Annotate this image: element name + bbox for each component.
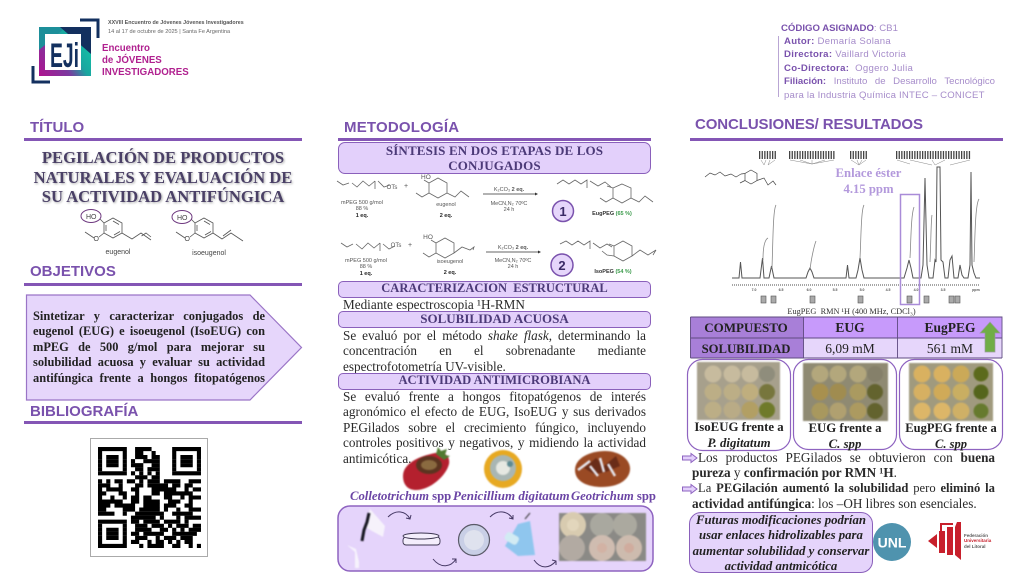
plate caption: C. spp xyxy=(935,437,967,451)
chemical structures: eugenol and isoeugenol: eugenol xyxy=(106,249,131,256)
section bar: solubilidad xyxy=(338,311,651,328)
reaction 2: MeCN,N₂ 70ºC xyxy=(495,257,531,264)
photo: fungal plates xyxy=(559,512,646,561)
section bar: caracterización: CARACTERIZACION ESTRUCTURAL xyxy=(381,281,608,295)
poster title: SU ACTIVIDAD ANTIFÚNGICA xyxy=(42,187,284,206)
logo mark: EJi xyxy=(50,37,79,75)
fungi labels xyxy=(350,488,656,503)
panel: plate EUG isoeugenol xyxy=(686,358,792,452)
reaction 2: 2 eq. xyxy=(444,270,457,276)
plate caption: EugPEG frente a xyxy=(905,421,997,435)
plate caption xyxy=(808,421,882,451)
reaction 2: K₂CO₃ 2 eq. xyxy=(498,245,529,251)
plate caption xyxy=(694,420,784,450)
reaction 2: mPEG 500 g/mol xyxy=(345,258,387,264)
reaction 1: 1 xyxy=(559,204,567,219)
photo: melon with mould xyxy=(575,451,630,487)
icon: inoculation bag xyxy=(347,509,385,568)
section bar: síntesis xyxy=(338,142,651,174)
photo: strawberry xyxy=(403,447,450,490)
event date: 14 al 17 de octubre de 2025 | Santa Fe Argentina xyxy=(108,29,230,35)
reaction 1: 24 h xyxy=(504,207,514,213)
logo: Federación Universitaria del Litoral: Universitaria xyxy=(964,538,992,543)
logo: Federación Universitaria del Litoral: Federación xyxy=(964,533,988,538)
axis xyxy=(732,284,980,286)
author information: para la Industria Química INTEC – CONICET xyxy=(784,90,985,100)
reaction 1: 88 % xyxy=(356,206,368,212)
reaction 2: isoeugenol xyxy=(437,259,463,265)
callout: future modifications: usar enlaces hidrolizables para xyxy=(699,528,863,542)
conclusion paragraphs: actividad antifúngica: los –OH libres son esenciales. xyxy=(692,496,977,511)
chemical structures: eugenol and isoeugenol: isoeugenol xyxy=(192,250,226,257)
conclusion paragraphs: Los productos PEGilados se obtuvieron con buena xyxy=(698,450,995,465)
logo: Federación Universitaria del Litoral xyxy=(928,522,992,560)
plate caption: P. digitatum xyxy=(707,436,771,450)
curved arrows xyxy=(388,512,556,567)
heading: bibliografía: BIBLIOGRAFÍA xyxy=(30,403,138,420)
chemical structures: eugenol and isoeugenol: HO xyxy=(86,214,97,221)
reaction 1: mPEG 500 g/mol xyxy=(341,200,383,206)
text: actividad: agronómico el efecto de EUG, IsoEUG y sus derivados xyxy=(343,404,646,419)
reaction 2: 24 h xyxy=(508,264,518,270)
fungi labels: Geotrichum spp xyxy=(571,489,656,503)
chemical structures: eugenol and isoeugenol: HO xyxy=(177,215,188,222)
conclusion paragraphs xyxy=(692,450,995,511)
reaction 1: 1 eq. xyxy=(356,213,369,219)
logo mark xyxy=(32,18,100,84)
caption: NMR: EugPEG RMN ¹H (400 MHz, CDCl₃) xyxy=(787,307,916,316)
table: solubility: 561 mM xyxy=(927,341,973,356)
reaction 1: HO xyxy=(421,174,431,181)
plate caption: IsoEUG frente a xyxy=(694,420,784,434)
conclusions text xyxy=(682,450,995,511)
section bar: actividad xyxy=(338,373,651,390)
heading: metodología: METODOLOGÍA xyxy=(344,119,459,136)
conclusion paragraphs: pureza y confirmación por RMN ¹H. xyxy=(692,465,897,480)
reaction 2 xyxy=(341,234,656,277)
reaction 2: HO xyxy=(423,234,433,241)
reaction 2: 88 % xyxy=(360,264,372,270)
panel: plate EugPEG xyxy=(898,358,1004,451)
text: actividad xyxy=(343,389,646,466)
callout: future modifications xyxy=(689,512,873,573)
peak assignments xyxy=(759,151,971,159)
event name: de JÓVENES xyxy=(102,55,162,66)
event name xyxy=(102,43,189,78)
NMR spectrum: 3.5 xyxy=(941,288,945,292)
author information: Filiación: Instituto de Desarrollo Tecnológico xyxy=(784,76,995,87)
text: solubilidad xyxy=(343,328,646,374)
callout: ppm value: 4.15 ppm xyxy=(843,182,894,196)
reaction 1: OTs xyxy=(387,185,397,191)
heading: objetivos: OBJETIVOS xyxy=(30,263,116,280)
reaction 1: EugPEG (65 %) xyxy=(592,211,632,217)
objective text: eugenol (EUG) e isoeugenol (IsoEUG) con xyxy=(33,324,265,338)
section bar: síntesis: SÍNTESIS EN DOS ETAPAS DE LOS xyxy=(386,143,603,158)
reaction 1 xyxy=(337,174,653,222)
chemical structures: eugenol and isoeugenol xyxy=(80,209,244,257)
table: solubility: EugPEG xyxy=(924,320,976,335)
objective text: solubilidad acuosa y evaluar su actividad xyxy=(33,355,265,369)
text: solubilidad: Se evaluó por el método shake flask, determinando la xyxy=(343,328,646,343)
structure of EugPEG xyxy=(705,170,776,185)
author information: Autor: Demaría Solana xyxy=(784,36,891,46)
text: actividad: PEGilados sobre el crecimiento fúngico, incluyendo xyxy=(343,420,646,435)
reaction 2: 1 eq. xyxy=(360,271,373,277)
reaction 1: 2 eq. xyxy=(440,213,453,219)
logo: Federación Universitaria del Litoral: del Litoral xyxy=(964,544,986,549)
QR code xyxy=(90,438,208,557)
bullet arrow 2 xyxy=(682,484,698,494)
table: solubility: 6,09 mM xyxy=(825,341,875,356)
bullet arrow 1 xyxy=(682,452,698,464)
event name: INVESTIGADORES xyxy=(102,67,189,78)
reaction 2: + xyxy=(408,242,412,249)
text: solubilidad: espectrofotometría UV-visible. xyxy=(343,359,506,374)
fungi labels: Penicillium digitatum xyxy=(453,488,570,503)
icon: green up arrow xyxy=(980,322,1000,352)
fungi labels: Colletotrichum spp xyxy=(350,489,451,503)
table: solubility xyxy=(690,316,1002,358)
section bar: solubilidad: SOLUBILIDAD ACUOSA xyxy=(420,311,569,326)
spectrum trace xyxy=(732,167,980,278)
objective text xyxy=(33,309,265,385)
heading: título: TÍTULO xyxy=(30,119,84,136)
text: actividad: antimicótica. xyxy=(343,451,411,466)
fungi photos xyxy=(402,446,632,491)
reaction scheme: synthesis steps xyxy=(336,174,656,277)
author information: Directora: Vaillard Victoria xyxy=(784,49,906,60)
plate caption xyxy=(905,421,997,451)
text: actividad: controles positivos y negativos, y midiendo la actividad xyxy=(343,435,646,450)
text: actividad: Se evaluó frente a hongos fitopatógenos de interés xyxy=(343,389,646,404)
reaction 2: 2 xyxy=(558,258,566,273)
objective arrow shape xyxy=(26,294,302,401)
event name: Encuentro xyxy=(102,43,150,54)
chemical structures: eugenol and isoeugenol: O xyxy=(94,236,100,243)
author information xyxy=(778,22,995,100)
icon: inoculated plate xyxy=(458,524,490,556)
callout: ester bond: Enlace éster xyxy=(836,166,902,180)
section bar: actividad: ACTIVIDAD ANTIMICROBIANA xyxy=(398,373,591,387)
NMR spectrum xyxy=(704,151,980,306)
poster title: NATURALES Y EVALUACIÓN DE xyxy=(34,168,292,187)
reaction 1: K₂CO₃ 2 eq. xyxy=(494,187,525,193)
NMR spectrum: 4.0 xyxy=(914,288,918,292)
poster title xyxy=(34,148,294,206)
panel: plate EUG xyxy=(792,358,898,451)
table: solubility: COMPUESTO xyxy=(704,320,788,335)
reaction 1: + xyxy=(404,183,408,190)
section bar: síntesis: CONJUGADOS xyxy=(448,158,541,173)
NMR spectrum: 5.5 xyxy=(833,288,837,292)
panel: título xyxy=(24,118,302,257)
NMR spectrum: 7.0 xyxy=(752,288,756,292)
table: solubility: SOLUBILIDAD xyxy=(702,342,790,356)
panel: objetivos xyxy=(24,263,302,401)
NMR spectrum: ppm xyxy=(972,288,980,292)
callout: future modifications: Futuras modificaciones podrían xyxy=(696,513,866,527)
plate caption: C. spp xyxy=(829,437,861,451)
reaction 1: eugenol xyxy=(436,202,456,208)
text: caracterización: Mediante espectroscopia ¹H-RMN xyxy=(343,297,525,312)
author information: Co-Directora: Oggero Julia xyxy=(784,62,913,74)
table: solubility: EUG xyxy=(835,320,865,335)
objective text: antifúngica frente a hongos fitopatógenos xyxy=(33,371,265,385)
photo: orange xyxy=(484,450,522,488)
logo: UNL xyxy=(873,523,911,561)
chemical structures: eugenol and isoeugenol: O xyxy=(184,236,190,243)
callout: future modifications: aumentar solubilidad y conservar xyxy=(693,544,869,558)
callout: future modifications: actividad antmicótica xyxy=(725,559,837,573)
NMR spectrum: 5.0 xyxy=(860,288,864,292)
panel: antifungal assay procedure xyxy=(337,505,654,572)
icon: petri dish xyxy=(403,533,440,545)
event line: XXVIII Encuentro de Jóvenes Jóvenes Investigadores xyxy=(108,20,244,26)
callout box: ester peak xyxy=(900,194,920,304)
poster title: PEGILACIÓN DE PRODUCTOS xyxy=(42,148,284,167)
panel: bibliografía xyxy=(24,402,302,557)
reaction 1: MeCN,N₂ 70ºC xyxy=(491,200,527,207)
integrals xyxy=(761,296,960,303)
logo: UNL: UNL xyxy=(878,534,907,550)
NMR spectrum: 4.5 xyxy=(886,288,890,292)
NMR spectrum: 6.0 xyxy=(807,288,811,292)
section bar: caracterización xyxy=(338,281,651,298)
text: solubilidad: concentración en el sobrenadante mediante xyxy=(343,343,646,358)
objective text: Sintetizar y caracterizar conjugados de xyxy=(33,309,265,323)
reaction 2: IsoPEG (54 %) xyxy=(594,269,632,275)
heading: conclusiones: CONCLUSIONES/ RESULTADOS xyxy=(695,116,923,133)
logo: EJI conference xyxy=(32,18,244,84)
NMR spectrum: 6.5 xyxy=(779,288,783,292)
objective text: mPEG de 500 g/mol para mejorar su xyxy=(33,340,265,354)
conclusion paragraphs: La PEGilación aumentó la solubilidad pero eliminó la xyxy=(698,481,995,495)
icon: gloved hand xyxy=(503,513,535,556)
reaction 2: OTs xyxy=(391,243,401,249)
author information: CÓDIGO ASIGNADO: CB1 xyxy=(781,23,898,34)
plate caption: EUG frente a xyxy=(808,421,881,435)
